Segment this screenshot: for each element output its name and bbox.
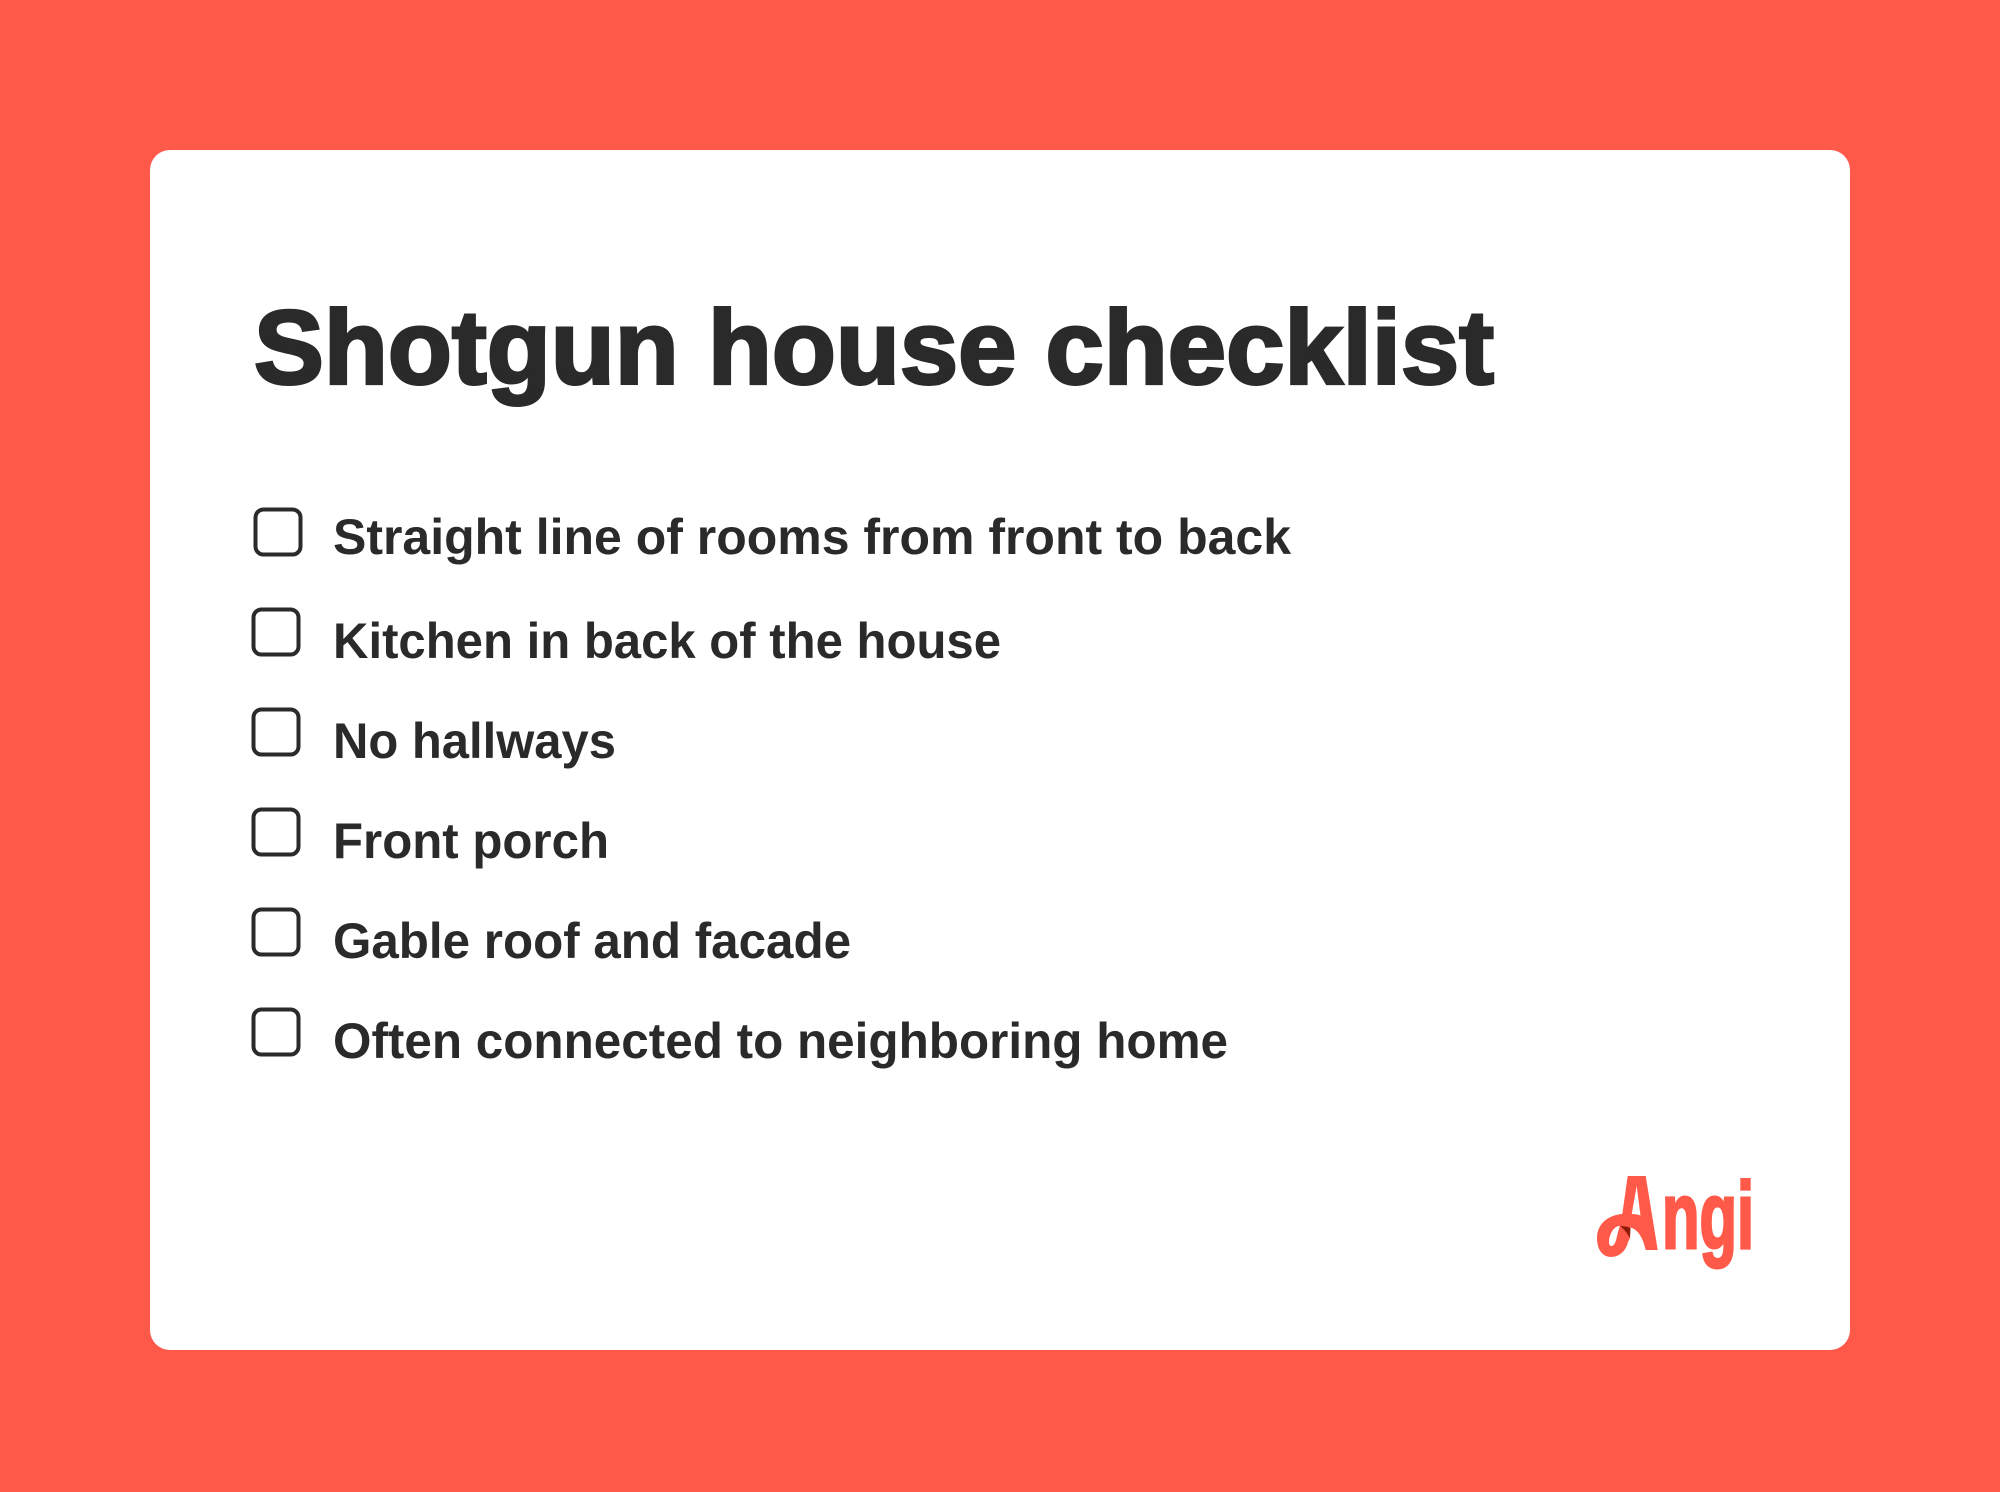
item 4: front porch: Front porch [333, 813, 609, 869]
item 1: straight line of rooms: Straight line of rooms from front to back [333, 509, 1291, 565]
item 5: gable roof: Gable roof and facade [333, 913, 851, 969]
item 3: no hallways: No hallways [333, 713, 616, 769]
logo: Angi [1597, 1159, 1754, 1271]
title: Shotgun house checklist [254, 290, 1494, 406]
panel: white card [150, 150, 1850, 1350]
logo: Angi: ngi [1662, 1163, 1754, 1269]
item 6: connected to neighbor: Often connected to neighboring home [333, 1013, 1228, 1069]
logo: Angi: A [1628, 1159, 1656, 1271]
item 2: kitchen: Kitchen in back of the house [333, 613, 1001, 669]
checklist [254, 509, 1291, 1069]
